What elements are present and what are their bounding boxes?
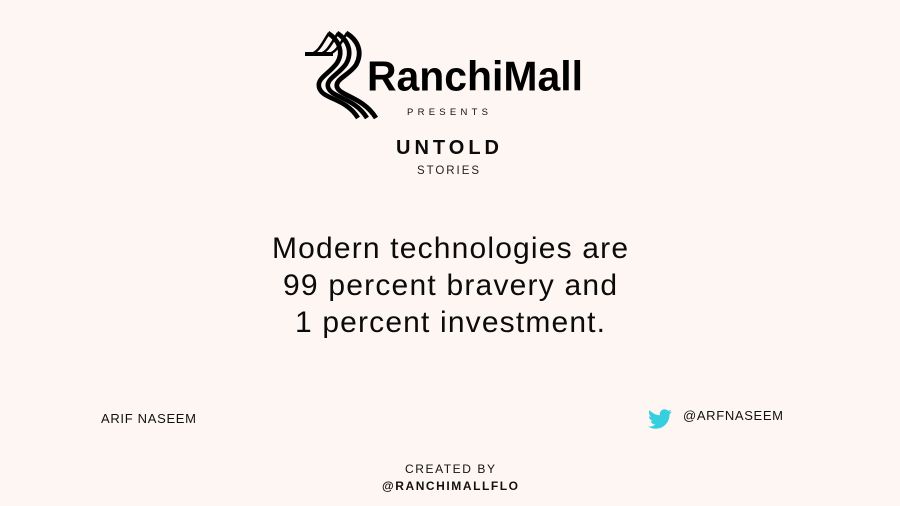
icon: RanchiMall logo mark xyxy=(305,33,376,118)
subheading: stories: STORIES xyxy=(417,165,479,177)
main quote: Modern technologies are xyxy=(272,232,628,265)
main quote: 1 percent investment. xyxy=(295,306,605,339)
twitter handle: @ARFNASEEM xyxy=(683,408,783,423)
author name: ARIF NASEEM xyxy=(101,411,196,426)
credit handle: @RANCHIMALLFLO xyxy=(382,479,518,493)
main quote xyxy=(272,232,628,339)
credit line: CREATED BY xyxy=(405,462,495,476)
logo wordmark: RanchiMall xyxy=(367,52,583,100)
icon: twitter bird xyxy=(648,409,672,429)
presents label: PRESENTS xyxy=(407,107,488,118)
main quote: 99 percent bravery and xyxy=(283,269,617,302)
heading: untold: UNTOLD xyxy=(396,137,499,159)
